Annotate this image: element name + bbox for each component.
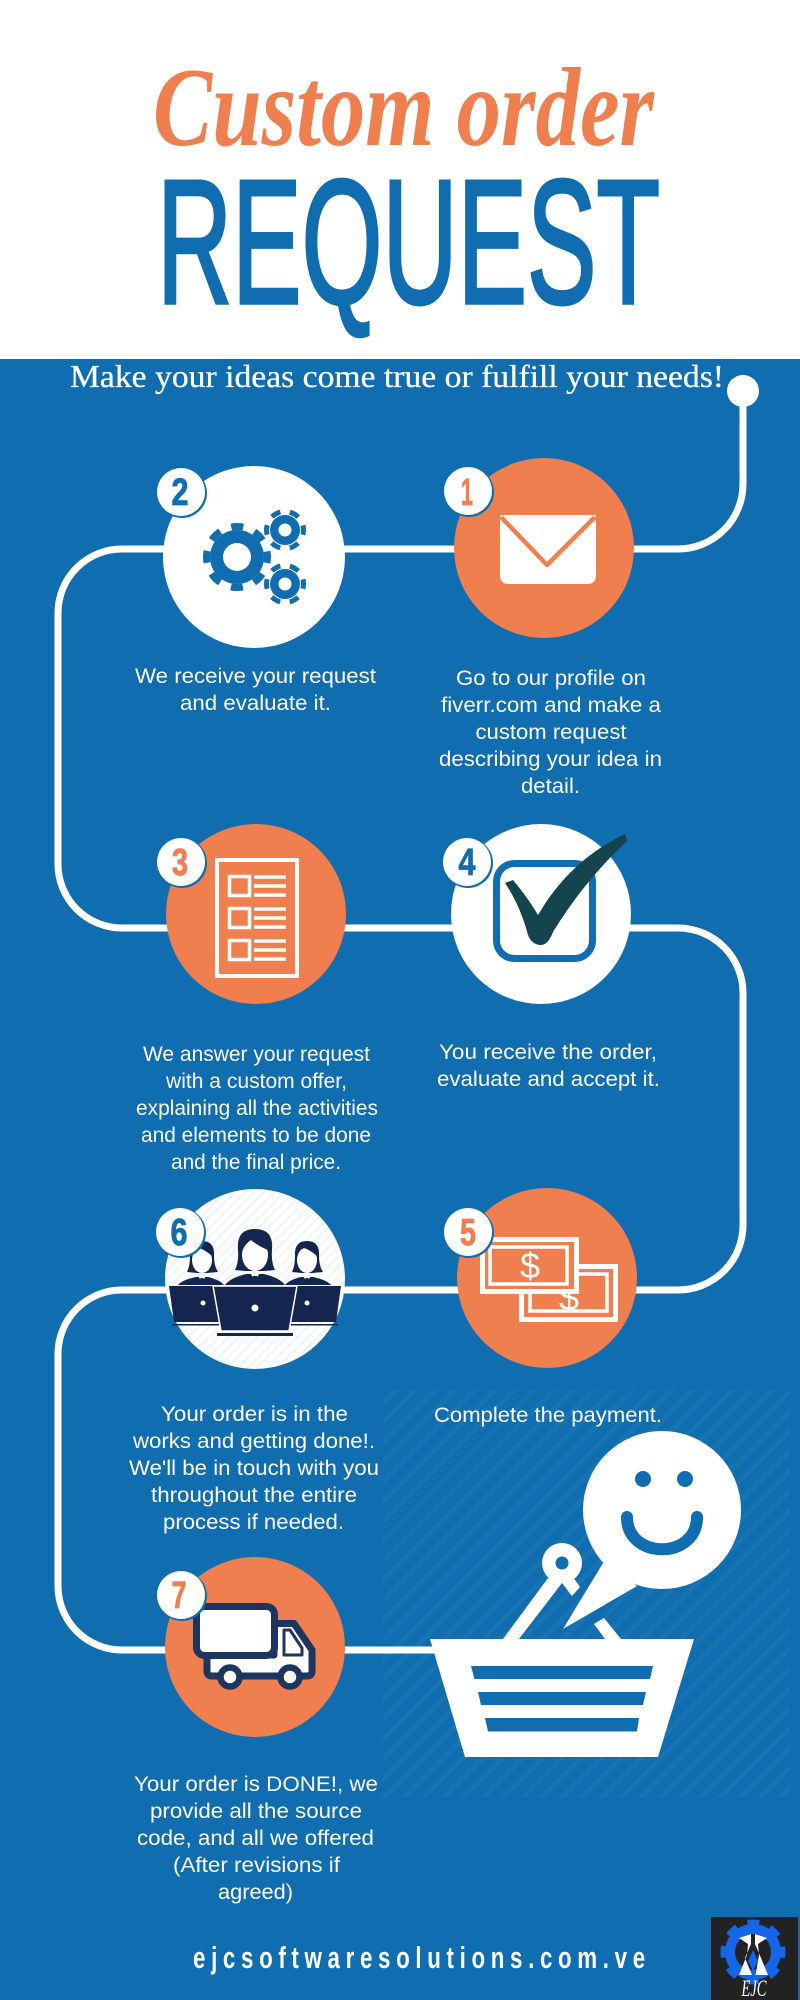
logo: EJC (711, 1917, 798, 2000)
icon: team at laptops (169, 1229, 341, 1336)
text: step 4 (437, 1040, 660, 1091)
person center (225, 1229, 285, 1285)
laptop center (213, 1286, 297, 1336)
text: step 1 (439, 666, 662, 798)
step 7 (134, 1557, 378, 1904)
laptop left (169, 1286, 220, 1326)
text: step 7: agreed) (218, 1880, 293, 1904)
tagline: Make your ideas come true or fulfill your needs! (70, 358, 724, 394)
connector path (58, 375, 759, 1650)
badge 4: 4 (458, 842, 476, 884)
icon: gears (206, 512, 304, 602)
icon: document checklist (217, 860, 297, 976)
footer website: ejcsoftwaresolutions.com.ve (193, 1940, 645, 1975)
text: step 2 (135, 664, 376, 715)
header panel (0, 0, 800, 359)
icon: shopping basket (430, 1543, 694, 1757)
text: step 1: fiverr.com and make a (441, 693, 661, 717)
text: step 6: process if needed. (163, 1510, 344, 1534)
badge 6 (156, 1208, 206, 1258)
step 3 (136, 824, 378, 1174)
text: step 4: You receive the order, (439, 1040, 657, 1064)
step 4 (437, 824, 660, 1091)
step 1 (439, 458, 662, 798)
person left (178, 1241, 224, 1285)
text: step 3 (136, 1042, 378, 1174)
text: step 3: and elements to be done (141, 1123, 371, 1147)
badge 7 (157, 1571, 207, 1621)
icon: banknotes: $ (520, 1245, 540, 1286)
badge 2 (157, 468, 207, 518)
badge 2: 2 (172, 472, 188, 514)
text: step 6: throughout the entire (151, 1483, 357, 1507)
badge 3: 3 (172, 842, 188, 884)
text: step 6 (129, 1402, 379, 1534)
text: step 3: We answer your request (143, 1042, 370, 1066)
text: step 7: (After revisions if (173, 1853, 340, 1877)
title: Custom order: Custom order (153, 46, 655, 170)
text: step 7: provide all the source (150, 1799, 362, 1823)
badge 1 (444, 467, 494, 517)
badge 5 (444, 1208, 494, 1258)
text: step 2: We receive your request (135, 664, 376, 688)
icon: delivery truck (196, 1606, 312, 1686)
text: step 6: We'll be in touch with you (129, 1456, 379, 1480)
start dot (727, 375, 759, 407)
badge 5: 5 (460, 1212, 476, 1254)
step 5 (434, 1188, 662, 1427)
person right (285, 1241, 331, 1285)
icon: smiley speech bubble (563, 1431, 741, 1629)
badge 6: 6 (170, 1212, 188, 1254)
text: step 7: code, and all we offered (137, 1826, 374, 1850)
icon: envelope (500, 515, 596, 584)
text: step 4: evaluate and accept it. (437, 1067, 660, 1091)
step 6 (129, 1189, 379, 1534)
badge 4 (443, 838, 493, 888)
text: step 3: explaining all the activities (136, 1096, 378, 1120)
icon: banknotes: $ (559, 1277, 579, 1318)
text: step 6: works and getting done!. (132, 1429, 375, 1453)
laptop right (290, 1286, 341, 1326)
text: step 7: Your order is DONE!, we (134, 1772, 378, 1796)
striped background: basket area (383, 1390, 790, 1797)
text: step 6: Your order is in the (161, 1402, 348, 1426)
icon: checkbox and tick (496, 834, 627, 958)
text: step 5: Complete the payment. (434, 1403, 662, 1427)
icon: banknotes (482, 1240, 616, 1320)
step 2 (135, 466, 376, 715)
badge 7: 7 (172, 1575, 186, 1617)
text: step 2: and evaluate it. (180, 691, 331, 715)
text: step 1: detail. (521, 774, 580, 798)
text: step 3: and the final price. (171, 1150, 341, 1174)
text: step 7 (134, 1772, 378, 1904)
badge 1: 1 (461, 472, 473, 514)
text: step 1: describing your idea in (439, 747, 662, 771)
text: step 1: Go to our profile on (456, 666, 646, 690)
text: step 3: with a custom offer, (165, 1069, 347, 1093)
text: step 1: custom request (476, 720, 627, 744)
badge 3 (157, 838, 207, 888)
